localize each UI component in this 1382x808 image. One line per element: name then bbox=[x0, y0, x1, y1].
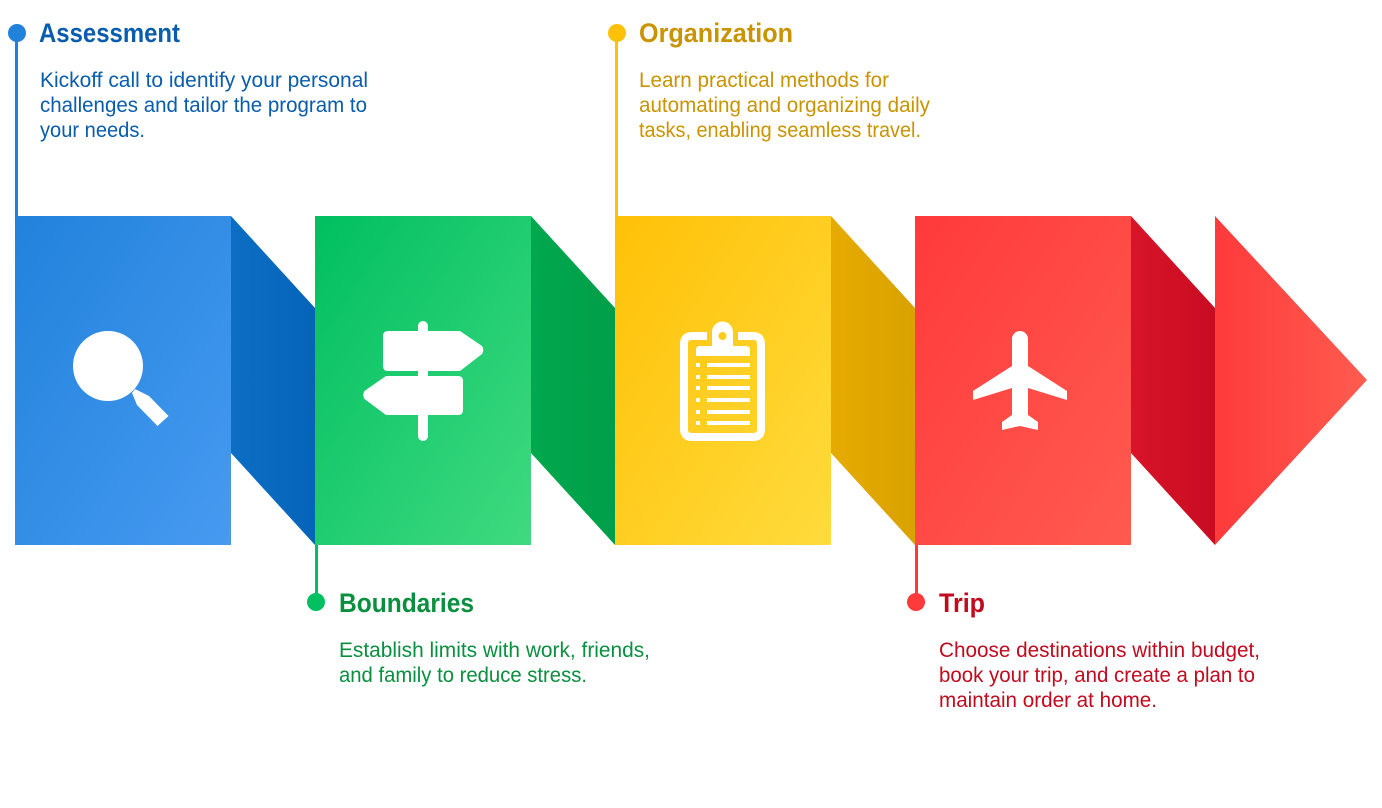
heading: Organization: Organization bbox=[639, 18, 793, 48]
fold: blue bbox=[231, 216, 315, 545]
panel: organization bbox=[615, 216, 831, 545]
connector: trip bbox=[907, 545, 925, 611]
text block: Boundaries description: and family to reduce stress. bbox=[339, 664, 587, 687]
arrow head bbox=[1215, 216, 1367, 545]
icon: airplane bbox=[973, 331, 1067, 430]
heading: Assessment: Assessment bbox=[39, 18, 180, 48]
panel: boundaries bbox=[315, 216, 531, 545]
icon: magnifying glass bbox=[73, 331, 168, 426]
connector: assessment bbox=[8, 24, 26, 217]
text block: Trip description: book your trip, and create a plan to bbox=[939, 664, 1255, 687]
text block: Assessment description: Kickoff call to identify your personal bbox=[40, 69, 368, 92]
text block: Trip description bbox=[939, 639, 1260, 712]
heading: Trip: Trip bbox=[939, 588, 985, 618]
text block: Assessment description: challenges and tailor the program to bbox=[40, 94, 367, 117]
fold: green bbox=[531, 216, 615, 545]
text block: Boundaries description bbox=[339, 639, 650, 687]
text block: Boundaries description: Establish limits with work, friends, bbox=[339, 639, 650, 662]
connector: organization bbox=[608, 24, 626, 217]
fold: yellow bbox=[831, 216, 915, 545]
text block: Organization description bbox=[639, 69, 930, 142]
text block: Assessment description bbox=[40, 69, 368, 142]
heading: Boundaries: Boundaries bbox=[339, 588, 474, 618]
fold: red bbox=[1131, 216, 1215, 545]
text block: Trip description: maintain order at home. bbox=[939, 689, 1157, 712]
text block: Assessment description: your needs. bbox=[40, 119, 145, 142]
text block: Organization description: automating and organizing daily bbox=[639, 94, 930, 117]
panel: assessment bbox=[15, 216, 231, 545]
panel: trip bbox=[915, 216, 1131, 545]
text block: Organization description: tasks, enabling seamless travel. bbox=[639, 119, 921, 142]
connector: boundaries bbox=[307, 545, 325, 611]
text block: Organization description: Learn practical methods for bbox=[639, 69, 889, 92]
icon: clipboard bbox=[684, 322, 761, 437]
icon: signpost bbox=[363, 321, 483, 441]
text block: Trip description: Choose destinations within budget, bbox=[939, 639, 1260, 662]
